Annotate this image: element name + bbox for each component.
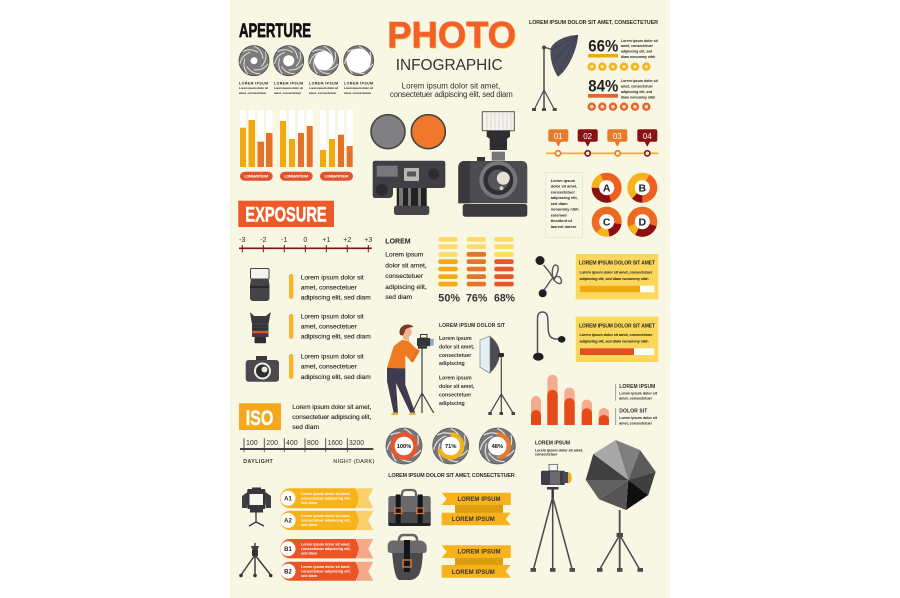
- ribbon B1: [280, 539, 373, 558]
- ribbon A2: A2: [284, 519, 292, 525]
- stat: 66 percent: amet, consectetuer: [621, 44, 654, 48]
- text: lorem column: dolor sit amet,: [385, 262, 427, 270]
- exposure text 3: Lorem ipsum dolor sit: [301, 354, 364, 360]
- exposure scale: +2: [343, 237, 351, 244]
- heading: exposure: EXPOSURE: [245, 204, 327, 226]
- gauge: 48 percent: 48%: [492, 444, 503, 450]
- ISO description: Lorem ipsum dolor sit amet,: [292, 404, 371, 411]
- ribbon B2: B2: [284, 569, 292, 575]
- icon: coiled cable: [536, 256, 561, 297]
- column 76 percent: 76%: [466, 293, 487, 305]
- stat: 66 percent: adipiscing elit, sed: [621, 50, 652, 54]
- chart legend: amet, consectetuer: [619, 397, 653, 401]
- icon: camera backpack: [388, 535, 427, 580]
- icon: DSLR camera with flash: [458, 112, 527, 217]
- exposure text 1: adipiscing elit, sed diam: [301, 294, 371, 301]
- bar chart pill labels: LOREM IPSUM: [284, 174, 309, 179]
- text: photographer notes: LOREM IPSUM DOLOR SIT: [439, 323, 505, 329]
- dashed text box: consectetuer: [551, 190, 575, 194]
- stat: 84 percent: [588, 77, 659, 110]
- dashed text box: dolor sit amet,: [551, 184, 577, 189]
- text: lorem column: Lorem ipsum: [385, 252, 424, 258]
- aperture captions: [239, 82, 373, 95]
- gauge: 71 percent: 71%: [445, 444, 456, 450]
- tag 01: 01: [554, 132, 563, 141]
- chart legend: Lorem ipsum dolor sit: [619, 416, 658, 420]
- ISO scale: 400: [286, 440, 298, 447]
- ribbon pair 2: LOREM IPSUM: [452, 570, 495, 576]
- text: photographer notes: [439, 323, 505, 407]
- ISO scale: 3200: [349, 440, 364, 447]
- stat: 84 percent: diam nonummy nibh: [621, 95, 655, 99]
- panel: lorem progress 1: [576, 254, 658, 299]
- exposure scale: +1: [322, 237, 330, 244]
- subtitle: [390, 82, 513, 99]
- exposure text 3: adipiscing elit, sed diam: [301, 374, 371, 381]
- text: lorem column: LOREM: [385, 238, 411, 246]
- aperture captions: amet, consectetuer: [344, 91, 372, 95]
- aperture captions: LOREM IPSUM: [309, 82, 338, 86]
- bar chart: aperture bars: [240, 110, 353, 181]
- bar chart pill labels: LOREM IPSUM: [244, 174, 269, 179]
- exposure text 2: Lorem ipsum dolor sit: [301, 314, 364, 320]
- exposure text 3: amet, consectetuer: [301, 364, 358, 371]
- dashed text box: adipiscing elit,: [551, 195, 578, 200]
- ribbon A1: consectetuer adipiscing elit,: [301, 497, 351, 501]
- exposure text 2: amet, consectetuer: [301, 324, 358, 330]
- exposure text 1: Lorem ipsum dolor sit: [301, 274, 364, 281]
- donut D: D: [639, 216, 647, 228]
- stat: 84 percent: Lorem ipsum dolor sit: [621, 79, 659, 83]
- ISO description: sed diam: [292, 424, 320, 431]
- tag 04: 04: [643, 132, 652, 141]
- aperture captions: Lorem ipsum dolor sit: [344, 86, 373, 90]
- ribbon A2: [280, 511, 373, 530]
- exposure scale: -1: [281, 237, 288, 244]
- panel: lorem progress 1: LOREM IPSUM DOLOR SIT AMET: [579, 260, 655, 266]
- exposure text 3: [289, 354, 371, 381]
- ISO scale: 100: [246, 440, 258, 447]
- column 50 percent: 50%: [438, 293, 460, 305]
- column 68 percent: 68%: [494, 293, 515, 305]
- icon: LED panel light: [242, 488, 271, 526]
- gauge: 48 percent: [478, 427, 518, 466]
- text: lorem column: [385, 238, 427, 301]
- text: photographer notes: Lorem ipsum: [439, 336, 472, 342]
- dashed text box: [546, 172, 582, 237]
- aperture captions: Lorem ipsum dolor sit: [274, 86, 303, 90]
- timeline 01 to 04: [546, 129, 658, 156]
- icon: camera briefcase: [388, 490, 431, 526]
- text: bottom right caption: Lorem ipsum dolor sit amet,: [535, 448, 583, 452]
- exposure scale: [239, 237, 372, 252]
- chart legend: [616, 384, 658, 425]
- ISO scale: [240, 438, 375, 465]
- icon: straight cable: [533, 312, 566, 361]
- title: INFOGRAPHIC: [396, 57, 503, 74]
- ISO scale: NIGHT (DARK): [333, 459, 375, 465]
- panel: lorem progress 2: LOREM IPSUM DOLOR SIT AMET: [579, 323, 655, 329]
- donut D: [631, 210, 654, 233]
- gauge: 100 percent: 100%: [397, 444, 411, 450]
- ribbon B2: [280, 562, 373, 581]
- ribbon pair 1: [442, 493, 511, 525]
- text: photographer notes: dolor sit amet,: [439, 384, 475, 390]
- text: bottom right caption: [535, 440, 583, 457]
- text: photographer notes: adipiscing: [439, 361, 465, 367]
- donut B: B: [639, 182, 647, 194]
- dashed text box: sed diam: [551, 201, 568, 206]
- bar chart: rounded orange columns: [531, 375, 609, 425]
- exposure text 2: [289, 314, 371, 340]
- subtitle: Lorem ipsum dolor sit amet,: [402, 82, 500, 91]
- icon: lens filters: [371, 115, 445, 149]
- illustration: photographer with tripod: [387, 325, 434, 415]
- aperture captions: LOREM IPSUM: [239, 82, 268, 86]
- heading: aperture: APERTURE: [239, 20, 311, 42]
- gauge caption: LOREM IPSUM DOLOR SIT AMET, CONSECTETUER: [388, 473, 515, 479]
- exposure text 2: adipiscing elit, sed diam: [301, 334, 371, 340]
- icon: speedlight flash: [250, 268, 270, 301]
- ribbon pair 1: LOREM IPSUM: [458, 497, 500, 503]
- stat: 66 percent: diam nonummy nibh: [621, 55, 655, 59]
- donut A: A: [603, 182, 611, 194]
- chart legend: DOLOR SIT: [619, 408, 647, 414]
- ISO scale: 1600: [328, 440, 343, 447]
- icon: aperture blades 3: [308, 45, 341, 78]
- ribbon A2: Lorem ipsum dolor sit amet,: [301, 514, 350, 518]
- panel: lorem progress 2: Lorem ipsum dolor sit amet, consectetuer: [580, 332, 653, 337]
- ribbon A1: [280, 488, 373, 508]
- text: lorem column: consectetuer: [385, 273, 424, 280]
- donut B: [631, 176, 654, 199]
- exposure scale: -3: [239, 237, 246, 244]
- icon: octagonal softbox on stand: [586, 440, 656, 572]
- aperture captions: amet, consectetuer: [309, 91, 337, 95]
- stat: 84 percent: 84%: [588, 77, 618, 96]
- icon: small tripod: [239, 543, 273, 577]
- ribbon B1: Lorem ipsum dolor sit amet,: [301, 542, 350, 546]
- aperture captions: Lorem ipsum dolor sit: [239, 86, 268, 90]
- icon: aperture blades 4: [343, 45, 376, 78]
- subtitle: consectetuer adipiscing elit, sed diam: [390, 90, 513, 99]
- chart legend: LOREM IPSUM: [619, 384, 655, 390]
- exposure scale: -2: [260, 237, 267, 244]
- exposure scale: +3: [364, 237, 372, 244]
- ribbon A1: A1: [284, 496, 292, 502]
- icon: camera top view: [373, 161, 445, 215]
- ribbon A2: consectetuer adipiscing elit,: [301, 519, 351, 523]
- dashed text box: Lorem ipsum: [551, 178, 576, 183]
- panel: lorem progress 2: [576, 317, 658, 362]
- title: [387, 15, 517, 74]
- donut C: C: [603, 216, 611, 228]
- text: photographer notes: adipiscing: [439, 401, 465, 407]
- ribbon B1: B1: [284, 547, 292, 553]
- ribbon B2: consectetuer adipiscing elit,: [301, 570, 351, 574]
- ribbon B1: consectetuer adipiscing elit,: [301, 547, 351, 551]
- bar chart pill labels: LOREM IPSUM: [324, 174, 349, 179]
- ribbon pair 1: LOREM IPSUM: [452, 517, 495, 523]
- dashed text box: nonummy nibh: [551, 207, 579, 212]
- exposure scale: 0: [303, 237, 307, 244]
- ISO scale: 200: [266, 440, 278, 447]
- dashed text box: laoreet dolore: [551, 224, 577, 229]
- heading: exposure: [238, 201, 334, 227]
- text: photographer notes: Lorem ipsum: [439, 376, 472, 382]
- text: photographer notes: consectetuer: [439, 353, 471, 359]
- dashed text box: euismod: [551, 212, 567, 218]
- tag 03: 03: [613, 132, 622, 141]
- chart legend: Lorem ipsum dolor sit: [619, 391, 658, 395]
- icon: camera lens: [250, 312, 271, 343]
- ISO description: consectetuer adipiscing elit,: [292, 414, 371, 421]
- gauge: 71 percent: [431, 427, 471, 466]
- text: photographer notes: dolor sit amet,: [439, 344, 475, 350]
- panel: lorem progress 1: adipiscing elit, sed diam nonummy nibh: [580, 276, 649, 281]
- heading: ISO: ISO: [246, 407, 273, 430]
- stat: 84 percent: amet, consectetuer: [621, 84, 654, 88]
- ribbon B2: Lorem ipsum dolor sit amet,: [301, 565, 350, 569]
- icon: camera on tripod: [530, 464, 575, 572]
- stat: 66 percent: Lorem ipsum dolor sit: [621, 39, 659, 43]
- title: PHOTO: [388, 15, 517, 56]
- icon: aperture blades 2: [273, 45, 306, 78]
- stat: 84 percent: adipiscing elit, sed: [621, 90, 652, 94]
- tag 02: 02: [583, 132, 593, 141]
- ribbon B1: sed diam: [301, 552, 318, 556]
- gauge: 100 percent: [385, 427, 424, 466]
- exposure text 1: [289, 274, 371, 301]
- icon: compact camera: [246, 356, 279, 382]
- ribbon B2: sed diam: [301, 574, 318, 578]
- ribbon pair 2: LOREM IPSUM: [458, 550, 500, 556]
- bar chart pill labels: [240, 172, 353, 181]
- aperture captions: LOREM IPSUM: [344, 82, 373, 86]
- ribbon A1: Lorem ipsum dolor sit amet,: [301, 492, 350, 496]
- icon: aperture blades 1: [238, 45, 271, 78]
- text: lorem column: adipiscing elit,: [385, 284, 427, 291]
- stat: 66 percent: [588, 37, 659, 70]
- section: aperture: [238, 20, 376, 95]
- ISO description: [292, 404, 371, 431]
- panel: lorem progress 2: adipiscing elit, sed diam nonummy nibh: [580, 338, 649, 343]
- header: top right: LOREM IPSUM DOLOR SIT AMET, CONSECTETUER: [529, 20, 658, 26]
- stat: 66 percent: 66%: [588, 37, 618, 56]
- text: bottom right caption: consectetuer: [535, 453, 558, 457]
- ribbon A1: sed diam: [301, 501, 318, 505]
- text: bottom right caption: LOREM IPSUM: [535, 440, 570, 446]
- aperture captions: amet, consectetuer: [274, 91, 302, 95]
- icon: softbox on stand: [480, 336, 515, 415]
- aperture captions: Lorem ipsum dolor sit: [309, 86, 338, 90]
- icon: umbrella light stand: [532, 35, 578, 111]
- text: lorem column: sed diam: [385, 294, 413, 301]
- donut A: [595, 176, 618, 199]
- panel: lorem progress 1: Lorem ipsum dolor sit amet, consectetuer: [580, 269, 653, 274]
- exposure text 1: amet, consectetuer: [301, 284, 358, 291]
- title: PHOTO: [387, 15, 516, 56]
- ISO scale: DAYLIGHT: [243, 459, 274, 465]
- aperture captions: LOREM IPSUM: [274, 82, 303, 86]
- chart: stacked level bars: [438, 237, 515, 305]
- ribbon pair 2: [442, 545, 511, 578]
- aperture captions: amet, consectetuer: [239, 91, 267, 95]
- text: photographer notes: consectetuer: [439, 392, 471, 398]
- ribbon A2: sed diam: [301, 523, 318, 527]
- dashed text box: tincidunt ut: [551, 218, 573, 223]
- ISO scale: 800: [307, 440, 319, 447]
- chart legend: amet, consectetuer: [619, 421, 653, 425]
- donut C: [595, 210, 618, 233]
